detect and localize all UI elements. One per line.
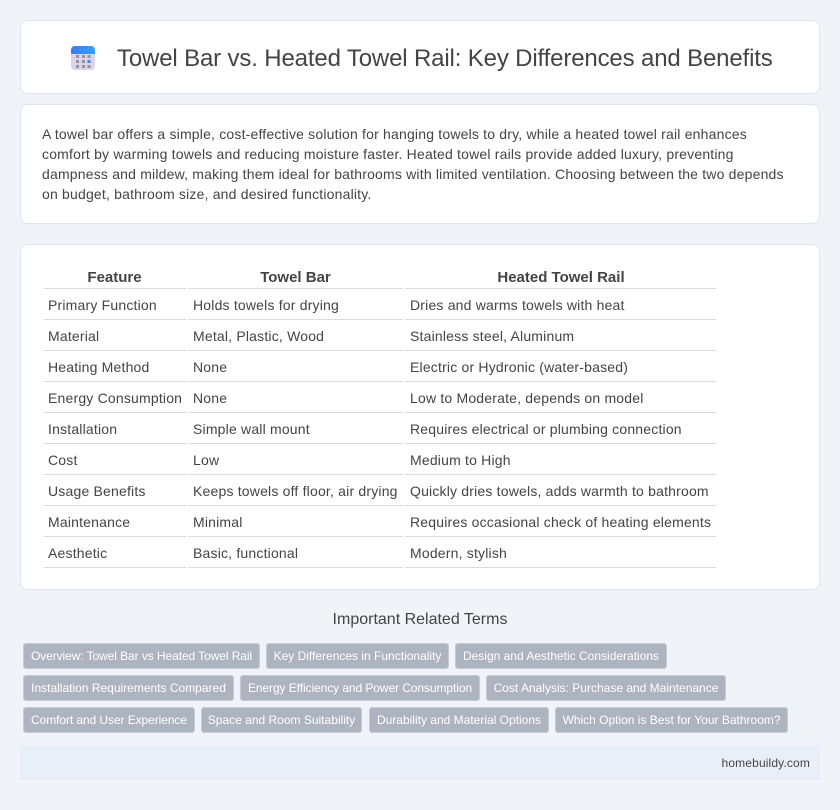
row: primary function: Dries and warms towels with heat xyxy=(410,297,625,313)
row: heating method: Heating Method xyxy=(48,359,150,375)
row: energy consumption: None xyxy=(193,390,227,406)
row: material xyxy=(48,328,574,344)
row: cost: Low xyxy=(193,452,219,468)
row: primary function xyxy=(48,297,625,313)
row: maintenance: Requires occasional check of heating elements xyxy=(410,514,711,530)
row: energy consumption: Energy Consumption xyxy=(48,390,182,406)
related terms tags: Which Option is Best for Your Bathroom? xyxy=(562,713,781,727)
row: heating method xyxy=(48,359,628,375)
related terms tags: Key Differences in Functionality xyxy=(274,649,441,663)
related terms tags: Space and Room Suitability xyxy=(208,713,355,727)
row: maintenance: Maintenance xyxy=(48,514,130,530)
row: cost: Cost xyxy=(48,452,78,468)
row: usage benefits: Quickly dries towels, adds warmth to bathroom xyxy=(410,483,709,499)
row: aesthetic xyxy=(48,545,507,561)
row: maintenance xyxy=(48,514,711,530)
related terms tags: Installation Requirements Compared xyxy=(31,681,226,695)
intro text: dampness and mildew, making them ideal for bathrooms with limited ventilation. Choosing between the two depends xyxy=(42,166,784,182)
row: heating method: None xyxy=(193,359,227,375)
table panel xyxy=(20,244,820,590)
row: cost xyxy=(48,452,511,468)
related terms tags: Overview: Towel Bar vs Heated Towel Rail xyxy=(31,649,252,663)
column headers: Towel Bar xyxy=(260,269,331,286)
intro text: comfort by warming towels and reducing moisture faster. Heated towel rails provide added luxury, preventing xyxy=(42,146,734,162)
row: aesthetic: Aesthetic xyxy=(48,545,107,561)
footer source: homebuildy.com xyxy=(722,756,810,770)
row: energy consumption: Low to Moderate, depends on model xyxy=(410,390,644,406)
row: material: Metal, Plastic, Wood xyxy=(193,328,324,344)
row: installation: Requires electrical or plumbing connection xyxy=(410,421,682,437)
row: maintenance: Minimal xyxy=(193,514,243,530)
column headers: Feature xyxy=(87,269,142,286)
row: usage benefits xyxy=(48,483,709,499)
related terms tags: Durability and Material Options xyxy=(377,713,541,727)
comparison table xyxy=(43,269,716,568)
row: usage benefits: Keeps towels off floor, air drying xyxy=(193,483,398,499)
row: material: Stainless steel, Aluminum xyxy=(410,328,574,344)
row: primary function: Holds towels for drying xyxy=(193,297,339,313)
icon: calendar xyxy=(71,46,95,70)
row: cost: Medium to High xyxy=(410,452,511,468)
header panel xyxy=(20,20,820,94)
row: aesthetic: Basic, functional xyxy=(193,545,298,561)
related terms tags: Energy Efficiency and Power Consumption xyxy=(248,681,472,695)
intro panel xyxy=(20,104,820,224)
related terms tags: Cost Analysis: Purchase and Maintenance xyxy=(494,681,718,695)
column headers: Heated Towel Rail xyxy=(497,269,625,286)
row: installation: Simple wall mount xyxy=(193,421,310,437)
related terms tags: Design and Aesthetic Considerations xyxy=(463,649,659,663)
row: energy consumption xyxy=(48,390,644,406)
row: heating method: Electric or Hydronic (water-based) xyxy=(410,359,628,375)
related terms tags: Comfort and User Experience xyxy=(31,713,187,727)
row: material: Material xyxy=(48,328,99,344)
related terms heading: Important Related Terms xyxy=(333,611,507,628)
intro text: on budget, bathroom size, and desired functionality. xyxy=(42,186,372,202)
intro text xyxy=(42,126,784,202)
footer bar xyxy=(20,746,820,780)
row: installation: Installation xyxy=(48,421,117,437)
row: usage benefits: Usage Benefits xyxy=(48,483,146,499)
intro text: A towel bar offers a simple, cost-effective solution for hanging towels to dry, while a heated towel rail enhances xyxy=(42,126,747,142)
row: installation xyxy=(48,421,682,437)
column headers xyxy=(87,269,625,286)
related terms tags xyxy=(23,643,788,733)
title: Towel Bar vs. Heated Towel Rail: Key Differences and Benefits xyxy=(117,45,773,72)
row: aesthetic: Modern, stylish xyxy=(410,545,507,561)
row: primary function: Primary Function xyxy=(48,297,157,313)
